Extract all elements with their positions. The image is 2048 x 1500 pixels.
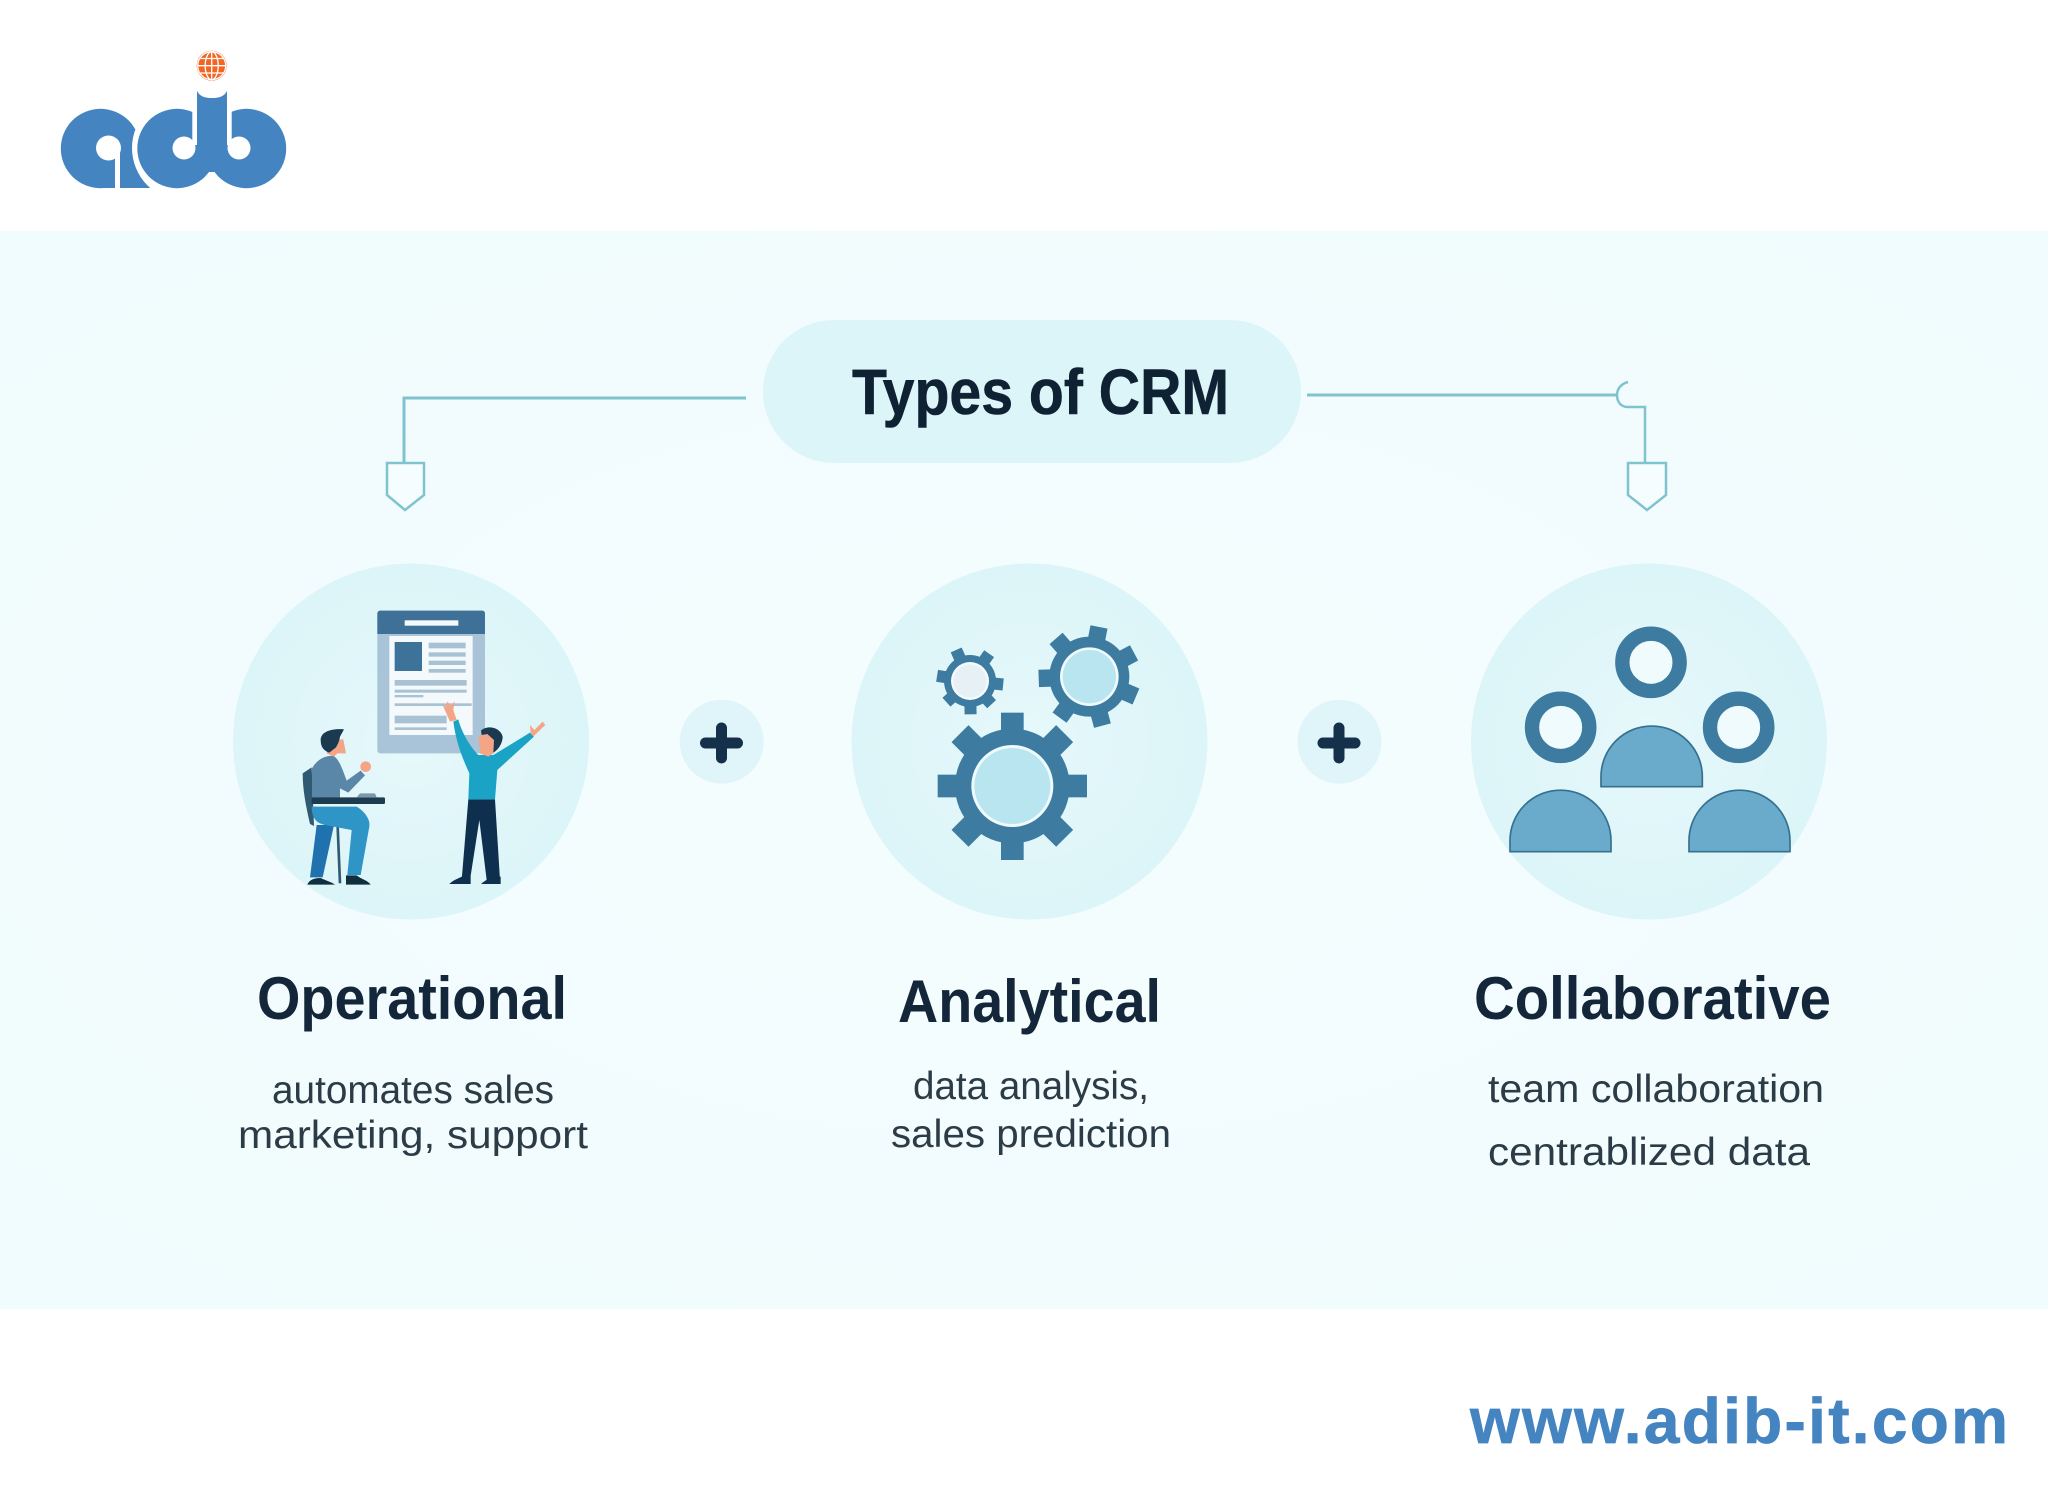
illustration: document and two people	[303, 611, 545, 885]
medium gear	[1038, 625, 1139, 728]
description: analytical: sales prediction	[891, 1113, 1171, 1156]
icon: right arrow shield	[1628, 463, 1666, 510]
logo letters	[61, 91, 286, 201]
icon: team of three people	[1510, 634, 1790, 852]
title pill	[763, 320, 1301, 463]
description: operational: marketing, support	[238, 1114, 588, 1157]
panel: main light background	[0, 231, 2048, 1309]
description: operational	[238, 1069, 588, 1157]
small gear	[936, 647, 1004, 714]
title: Types of CRM	[852, 356, 1229, 428]
person: left	[1510, 699, 1611, 852]
heading: collaborative: Collaborative	[1474, 965, 1831, 1032]
large gear	[938, 713, 1087, 860]
plus badge: left	[680, 700, 764, 784]
heading: operational: Operational	[257, 965, 567, 1032]
description: analytical	[891, 1065, 1171, 1156]
icon circle: operational	[233, 564, 589, 920]
standing person	[443, 701, 545, 884]
icon: orange globe	[197, 51, 227, 81]
heading: analytical: Analytical	[898, 968, 1161, 1035]
plus badge: right	[1298, 700, 1382, 784]
seated person	[303, 729, 385, 885]
connector: left	[387, 398, 746, 510]
logo: adib	[61, 51, 286, 201]
description: collaborative: centrablized data	[1488, 1131, 1810, 1174]
panel: operational	[233, 564, 589, 1157]
panel: collaborative	[1471, 564, 1831, 1174]
description: collaborative: team collaboration	[1488, 1068, 1824, 1111]
icon circle: analytical	[852, 564, 1208, 920]
icon: gears	[936, 625, 1139, 860]
icon: left arrow shield	[387, 463, 424, 510]
icon circle: collaborative	[1471, 564, 1827, 920]
description: analytical: data analysis,	[913, 1065, 1149, 1108]
panel: analytical	[852, 564, 1208, 1156]
website url: www.adib-it.com	[1469, 1385, 2008, 1457]
document	[377, 611, 485, 753]
person: right	[1689, 699, 1790, 852]
person: top	[1601, 634, 1702, 787]
description: operational: automates sales	[272, 1069, 554, 1112]
description: collaborative	[1488, 1068, 1824, 1174]
connector: right	[1307, 382, 1666, 510]
